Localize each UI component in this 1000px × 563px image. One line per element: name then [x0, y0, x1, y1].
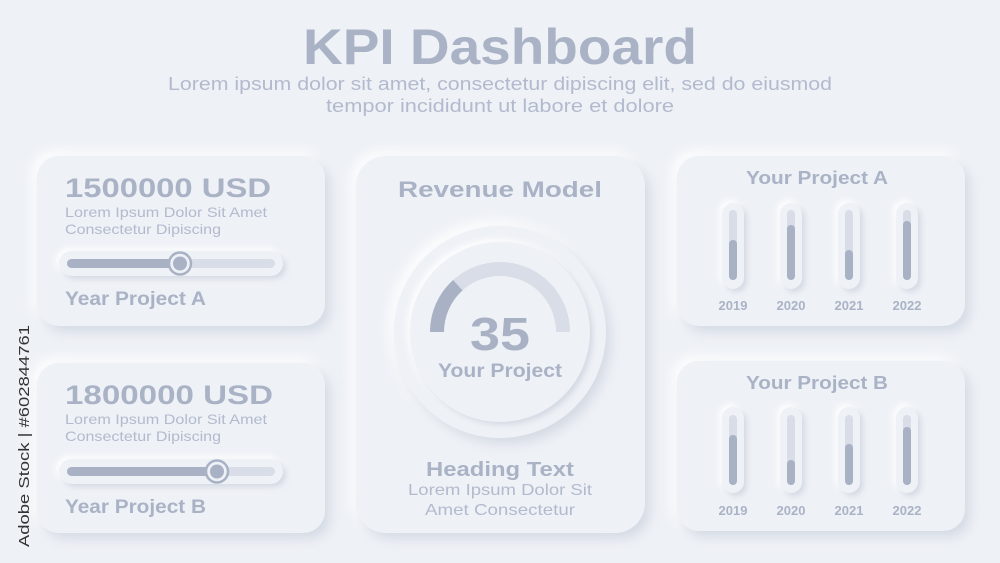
- bar chart A: 2021: [835, 298, 863, 313]
- gauge value: 35: [470, 308, 530, 360]
- subtitle: Lorem ipsum dolor sit amet, consectetur dipiscing elit, sed do eiusmod: [168, 74, 832, 94]
- panel: 1800000 USD: [37, 363, 325, 533]
- watermark id: Adobe Stock | #602844761: [16, 325, 33, 547]
- heading B: Your Project B: [746, 373, 888, 393]
- bar chart A: 2020: [777, 298, 805, 313]
- value A: 1500000 USD: [65, 173, 271, 203]
- panel: your project A: [677, 156, 965, 326]
- bar chart B: 2020: [777, 503, 805, 518]
- panel: 1500000 USD: [37, 156, 325, 326]
- heading text: Heading Text: [426, 459, 574, 481]
- description B: [65, 411, 267, 444]
- center description: [408, 482, 593, 519]
- subtitle: tempor incididunt ut labore et dolore: [326, 96, 674, 116]
- bar chart A: 2019: [719, 298, 747, 313]
- gauge label: Your Project: [438, 361, 563, 382]
- description A: Consectetur Dipiscing: [65, 221, 221, 237]
- gauge: [394, 226, 606, 438]
- bar chart B: 2021: [835, 503, 863, 518]
- panel: your project B: [677, 361, 965, 531]
- bar chart B: [719, 407, 921, 518]
- slider A: [59, 251, 283, 276]
- center description: Amet Consectetur: [425, 502, 576, 519]
- bar chart B: 2019: [719, 503, 747, 518]
- value B: 1800000 USD: [65, 380, 273, 410]
- description A: Lorem Ipsum Dolor Sit Amet: [65, 204, 267, 220]
- slider B: [59, 459, 283, 484]
- bar chart B: 2022: [893, 503, 921, 518]
- label B: Year Project B: [65, 497, 206, 518]
- description B: Lorem Ipsum Dolor Sit Amet: [65, 411, 267, 427]
- subtitle: [168, 74, 832, 116]
- panel: revenue model: [356, 156, 645, 533]
- label A: Year Project A: [65, 289, 206, 310]
- bar chart A: [719, 203, 921, 313]
- bar chart A: 2022: [893, 298, 921, 313]
- title: KPI Dashboard: [303, 19, 697, 75]
- revenue heading: Revenue Model: [398, 177, 602, 202]
- center description: Lorem Ipsum Dolor Sit: [408, 482, 593, 499]
- description A: [65, 204, 267, 237]
- heading A: Your Project A: [746, 168, 888, 188]
- description B: Consectetur Dipiscing: [65, 428, 221, 444]
